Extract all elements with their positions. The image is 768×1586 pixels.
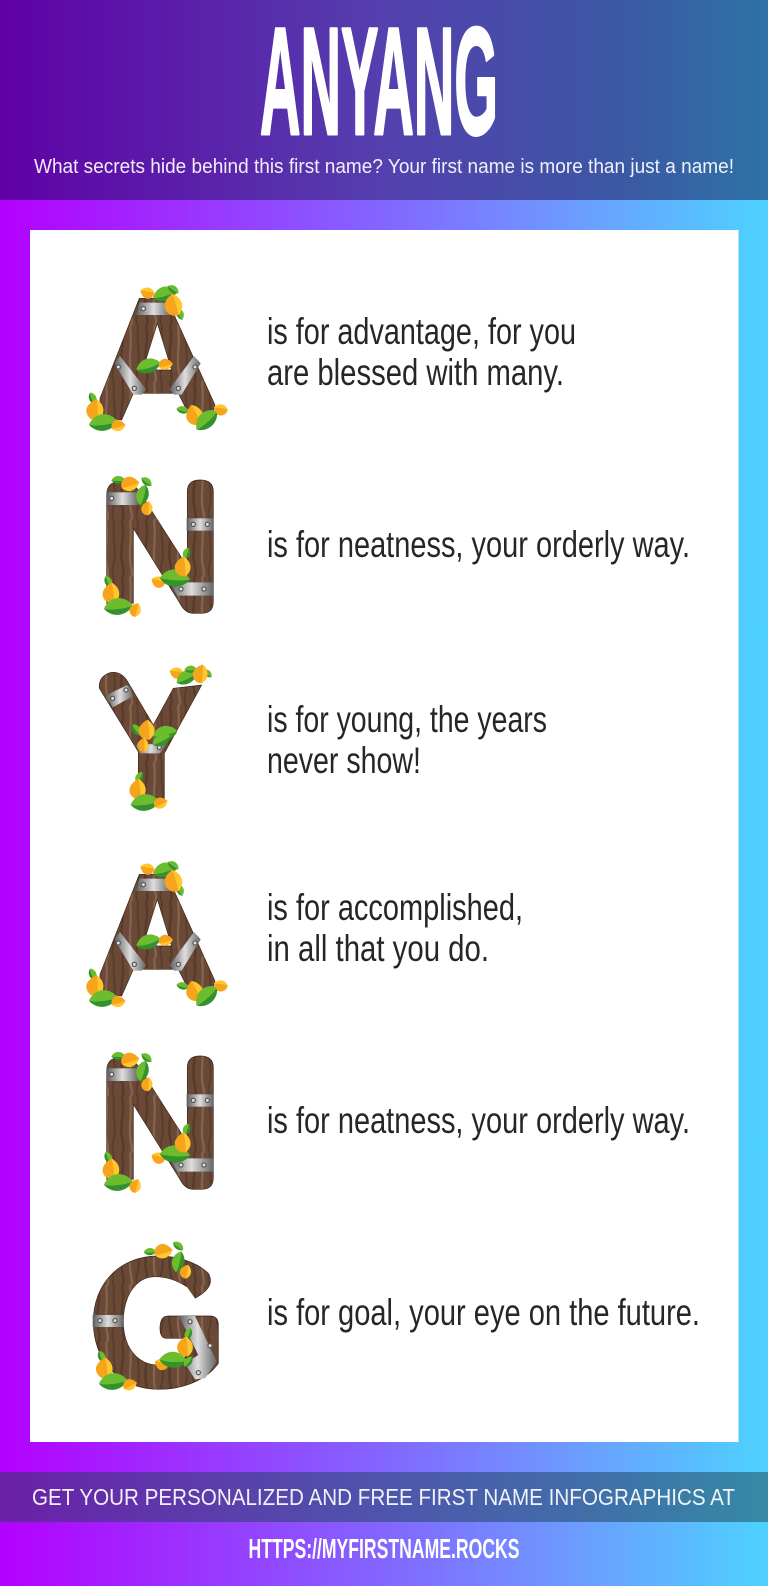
footer band bbox=[0, 1472, 768, 1522]
footer URL: HTTPS://MYFIRSTNAME.ROCKS bbox=[248, 1533, 520, 1564]
icon: wooden letter A bbox=[86, 283, 229, 435]
text: A line: is for advantage, for you bbox=[267, 311, 576, 352]
subtitle: What secrets hide behind this first name? Your first name is more than just a name! bbox=[34, 156, 734, 178]
text: A line: are blessed with many. bbox=[267, 352, 564, 393]
text: Y line bbox=[267, 699, 547, 781]
icon: wooden letter N bbox=[103, 475, 213, 618]
text: A line: is for accomplished, bbox=[267, 887, 523, 928]
text: A line: in all that you do. bbox=[267, 928, 489, 969]
icon: wooden letter N bbox=[103, 1051, 213, 1194]
icon: wooden letter A bbox=[86, 859, 229, 1011]
header banner bbox=[0, 0, 768, 200]
panel: white letters card bbox=[30, 230, 738, 1442]
text: Y line: never show! bbox=[267, 740, 421, 781]
text: A line bbox=[267, 887, 523, 969]
text: Y line: is for young, the years bbox=[267, 699, 547, 740]
icon: wooden letter Y bbox=[99, 663, 214, 812]
text: A line bbox=[267, 311, 576, 393]
icon: wooden letter G bbox=[93, 1239, 218, 1392]
